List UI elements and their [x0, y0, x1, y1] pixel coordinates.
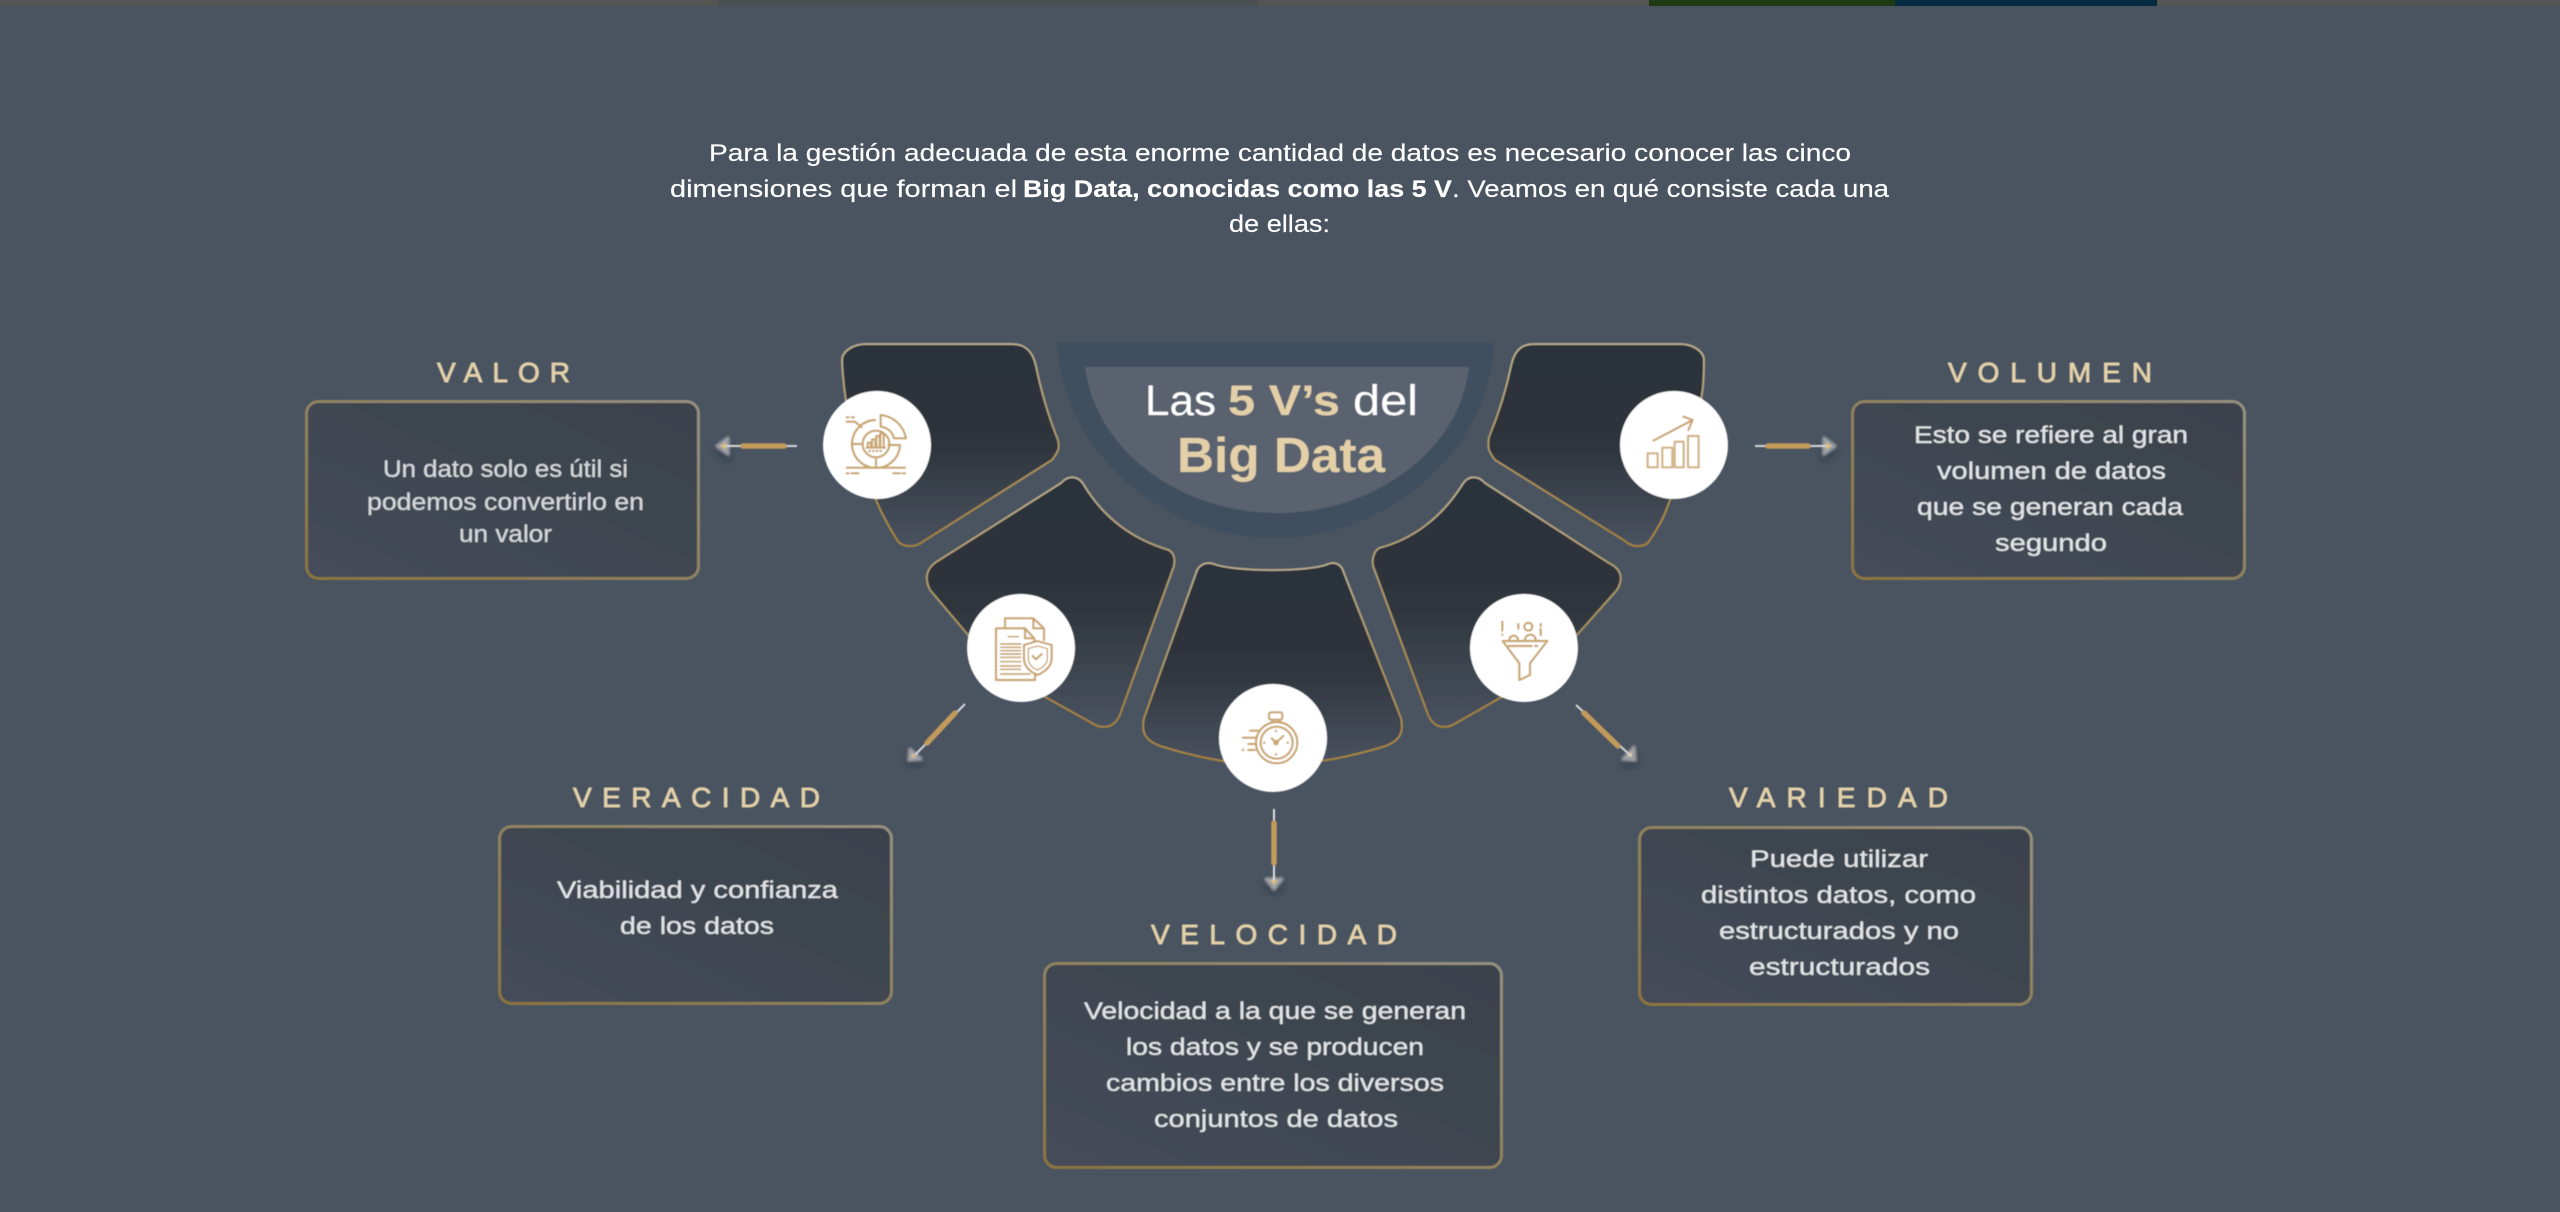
icon: valor donut chart — [823, 391, 931, 499]
text box: velocidad: los datos y se producen — [1126, 1034, 1424, 1061]
panel shape: velocidad — [1143, 563, 1402, 765]
intro paragraph: . Veamos en qué consiste cada una — [1452, 176, 1890, 203]
icon: volumen growth bars — [1620, 391, 1728, 499]
arrow: to veracidad — [909, 704, 965, 760]
text box: variedad: Puede utilizar — [1750, 846, 1928, 873]
heading: Las 5 V's del Big Data — [1145, 377, 1418, 483]
intro paragraph: dimensiones que forman el — [670, 176, 1017, 203]
text box: velocidad: conjuntos de datos — [1154, 1106, 1398, 1133]
text box: volumen — [1852, 402, 2244, 578]
diagram — [306, 342, 2244, 1168]
icon: velocidad stopwatch — [1219, 684, 1327, 792]
text box: valor: Un dato solo es útil si — [383, 456, 628, 483]
text box: veracidad — [500, 826, 892, 1004]
text box: velocidad — [1044, 964, 1502, 1168]
text box: veracidad: Viabilidad y confianza — [557, 877, 839, 904]
text box: velocidad: Velocidad a la que se generan — [1084, 998, 1466, 1025]
title: VALOR: VALOR — [437, 357, 570, 388]
text box: velocidad: cambios entre los diversos — [1106, 1070, 1444, 1097]
text box: variedad — [1640, 828, 2032, 1004]
top image strip — [0, 0, 2560, 6]
text box: variedad: estructurados y no — [1719, 918, 1959, 945]
panel shape: volumen — [1488, 344, 1704, 546]
text box: volumen: Esto se refiere al gran — [1914, 422, 2188, 449]
text box: valor — [306, 402, 698, 578]
intro paragraph: Big Data, conocidas como las 5 V — [1023, 176, 1452, 203]
text box: volumen: volumen de datos — [1937, 458, 2166, 485]
heading: Las 5 V's del Big Data: Las — [1145, 377, 1216, 425]
arrow: to valor — [717, 438, 797, 454]
central semicircle badge — [1057, 342, 1494, 538]
text box: variedad: estructurados — [1749, 954, 1930, 981]
heading: Las 5 V's del Big Data: 5 V’s — [1228, 377, 1340, 425]
text box: variedad: distintos datos, como — [1701, 882, 1976, 909]
title: VERACIDAD: VERACIDAD — [573, 782, 820, 813]
title: VARIEDAD: VARIEDAD — [1729, 782, 1948, 813]
panel shape: valor — [842, 344, 1059, 546]
intro paragraph: de ellas: — [1229, 211, 1330, 238]
intro paragraph: Para la gestión adecuada de esta enorme cantidad de datos es necesario conocer las cinco — [709, 140, 1851, 167]
heading: Las 5 V's del Big Data: del — [1353, 377, 1418, 425]
arrow: to volumen — [1755, 438, 1835, 454]
text box: volumen: que se generan cada — [1917, 494, 2184, 521]
panel shape: veracidad — [927, 477, 1174, 727]
heading: Las 5 V's del Big Data: Big Data — [1177, 429, 1386, 483]
icon: variedad funnel — [1470, 594, 1578, 702]
text box: volumen: segundo — [1995, 530, 2107, 557]
title: VOLUMEN: VOLUMEN — [1948, 357, 2152, 388]
panel shape: variedad — [1373, 477, 1621, 727]
title: VELOCIDAD: VELOCIDAD — [1151, 919, 1397, 950]
arrow: to velocidad — [1266, 809, 1282, 889]
text box: valor: un valor — [459, 521, 552, 548]
icon: veracidad document shield — [967, 594, 1075, 702]
intro paragraph — [670, 140, 1890, 238]
text box: valor: podemos convertirlo en — [367, 489, 644, 516]
arrow: to variedad — [1576, 705, 1635, 760]
text box: veracidad: de los datos — [620, 913, 774, 940]
